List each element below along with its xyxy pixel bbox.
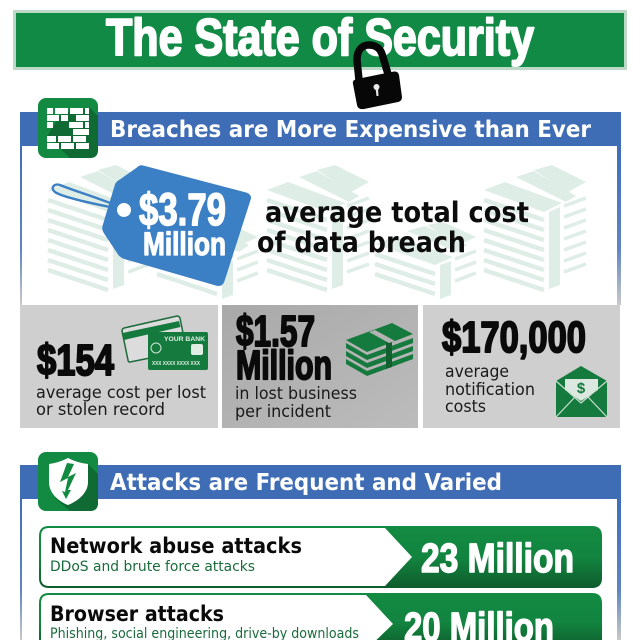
price tag — [53, 166, 251, 286]
stat label: or stolen record — [36, 400, 165, 420]
stat value: $170,000 — [442, 313, 586, 362]
stat label: average cost per lost — [36, 383, 206, 403]
tag string — [53, 185, 110, 207]
stat value: Million — [236, 342, 332, 388]
stat label: costs — [445, 397, 486, 417]
panel: attacks — [20, 465, 621, 640]
stat label: notification — [445, 380, 535, 400]
tag amount: $3.79 — [139, 184, 226, 235]
icon: shield with lightning bolt — [38, 452, 98, 511]
section header bar: attacks — [20, 465, 621, 499]
stat value — [236, 307, 332, 388]
icon: bank cards — [122, 316, 208, 370]
background buildings — [48, 165, 586, 299]
icon: stack of money — [346, 323, 413, 376]
title banner — [14, 9, 626, 68]
average total cost text — [257, 196, 529, 259]
stat label: in lost business — [235, 384, 357, 404]
stat value: $1.57 — [236, 307, 315, 356]
stat box: notification costs — [423, 305, 620, 428]
tag body — [103, 166, 250, 286]
stat label — [235, 384, 357, 422]
icon: brick wall — [38, 98, 98, 158]
heading: breaches: Breaches are More Expensive than Ever — [110, 115, 591, 143]
stat value: $154 — [37, 336, 114, 385]
row: network abuse attacks — [39, 526, 602, 588]
row text: Network abuse attacks — [50, 534, 302, 558]
row value: 23 Million — [421, 535, 574, 581]
icon: padlock — [353, 45, 402, 109]
average total cost text: of data breach — [257, 226, 466, 259]
stat label: per incident — [235, 402, 331, 422]
stat label: average — [445, 362, 509, 382]
average total cost text: average total cost — [265, 196, 529, 229]
stat label — [36, 383, 206, 420]
stat label — [445, 362, 535, 417]
row: network abuse attacks: DDoS and brute force attacks — [50, 559, 255, 575]
title text: The State of Security — [106, 9, 534, 67]
section header bar: breaches — [20, 112, 621, 146]
icon: envelope with money — [556, 366, 607, 417]
icon: envelope with money: $ — [577, 380, 586, 397]
icon: bank cards: YOUR BANK — [164, 336, 205, 343]
heading: attacks: Attacks are Frequent and Varied — [110, 468, 502, 496]
stat box: cost per record — [20, 305, 218, 428]
price tag: Million — [143, 226, 226, 262]
row text: Browser attacks — [50, 602, 224, 626]
row: browser attacks — [39, 593, 602, 640]
icon: bank cards: XXX XXXX XXXX XXX — [152, 361, 201, 367]
stat box: lost business — [222, 305, 418, 428]
panel: breaches — [20, 112, 621, 305]
